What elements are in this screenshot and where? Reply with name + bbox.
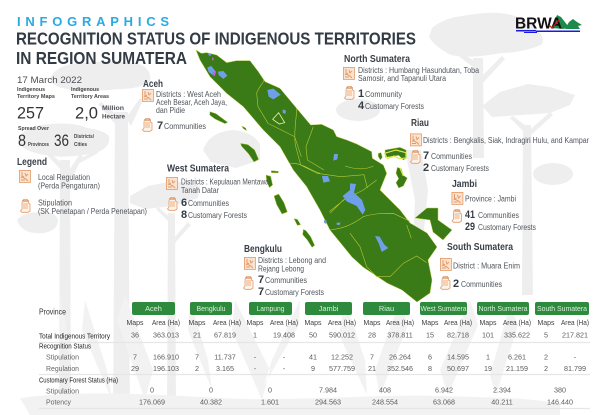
stipulation row: 7	[195, 352, 199, 362]
customary forest stipulation row	[150, 386, 566, 394]
customary forest stipulation row: 0	[150, 386, 154, 394]
legend: Stipulation	[38, 198, 72, 208]
region: Bengkulu: Bengkulu	[244, 243, 282, 255]
key figures: Indigenous	[17, 87, 45, 93]
stipulation row: 6.261	[508, 352, 526, 362]
right tree	[510, 112, 553, 295]
title: INFOGRAPHICS	[17, 14, 169, 29]
region: Bengkulu	[244, 243, 326, 298]
row labels: Province	[39, 308, 66, 316]
legend: Legend	[17, 156, 47, 168]
province buttons: Lampung	[256, 304, 284, 313]
region: Riau: Communities	[431, 152, 472, 161]
column headers: Maps	[422, 318, 439, 327]
date: 17 March 2022	[17, 75, 82, 86]
row labels	[39, 308, 118, 406]
key figures: Provinces	[28, 142, 49, 148]
province buttons: North Sumatera	[478, 304, 528, 313]
row labels: Customary Forest Status (Ha)	[39, 376, 118, 384]
regulation row: 21	[368, 364, 376, 373]
column headers: Maps	[364, 318, 381, 327]
column headers: Area (Ha)	[561, 318, 589, 327]
region: Aceh: 7	[157, 120, 163, 132]
upper-right tree	[456, 51, 505, 158]
region: Jambi: Jambi	[452, 178, 477, 190]
region: South Sumatera	[440, 241, 520, 290]
column headers: Maps	[304, 318, 322, 327]
customary forest potency row: 248.554	[372, 398, 398, 406]
province buttons: South Sumatera	[537, 304, 588, 313]
regulation row: 81.799	[564, 364, 586, 373]
key figures: Indigenous	[71, 87, 99, 93]
region: North Sumatera: Samosir, and Tapanuli Utara	[358, 74, 446, 83]
region: North Sumatera: 1	[358, 88, 364, 100]
customary forest stipulation row: 2.394	[493, 386, 511, 394]
region: Riau	[410, 117, 589, 174]
region: South Sumatera: South Sumatera	[447, 241, 513, 253]
region: North Sumatera: 4	[358, 100, 365, 112]
stipulation row: 166.910	[153, 352, 179, 362]
column headers: Maps	[246, 318, 264, 327]
region: South Sumatera: 2	[453, 278, 459, 290]
column headers: Maps	[480, 318, 497, 327]
region: Bengkulu: Districts : Lebong and	[258, 256, 326, 265]
total row: 101	[482, 330, 494, 340]
stipulation row: 14.595	[447, 352, 469, 362]
key figures: Hectare	[102, 114, 125, 120]
customary forest potency row: 40.211	[491, 398, 513, 406]
stipulation row: 12.252	[331, 352, 353, 362]
regulation row: 29	[131, 364, 139, 373]
total row: 19.408	[273, 330, 295, 340]
background: palm leaves	[20, 295, 560, 415]
stipulation row	[133, 352, 577, 362]
stipulation row: -	[574, 352, 577, 362]
region: West Sumatera	[166, 162, 272, 221]
region: Bengkulu: Customary Forests	[265, 288, 324, 297]
regulation row: 19	[484, 364, 492, 373]
total row: 50	[309, 330, 317, 340]
region: North Sumatera: North Sumatera	[344, 53, 410, 65]
region: Jambi: Province : Jambi	[465, 194, 516, 204]
key figures: Districts/	[74, 134, 94, 140]
stipulation row: -	[254, 352, 257, 362]
regulation row: 9	[311, 364, 315, 373]
key figures: 36	[54, 131, 69, 150]
region: Aceh	[142, 78, 227, 132]
column headers: Area (Ha)	[503, 318, 531, 327]
logo: BRWA: BRWA	[515, 16, 562, 32]
stipulation row: 1	[486, 352, 490, 362]
customary forest stipulation row: 408	[379, 386, 391, 394]
legend: (SK Penetapan / Perda Penetapan)	[38, 207, 147, 216]
region: South Sumatera: District : Muara Enim	[453, 262, 520, 270]
customary forest potency row: 1.601	[261, 398, 279, 406]
column headers: Area (Ha)	[270, 318, 298, 327]
regulation row: 2	[195, 364, 199, 373]
column headers: Area (Ha)	[213, 318, 241, 327]
customary forest stipulation row: 380	[554, 386, 566, 394]
stipulation row: 11.737	[214, 352, 236, 362]
total row: 217.821	[562, 330, 588, 340]
row labels: Stipulation	[46, 352, 79, 362]
column headers: Area (Ha)	[328, 318, 356, 327]
row labels: Potency	[46, 398, 71, 406]
region: West Sumatera: 8	[181, 209, 187, 221]
column headers	[126, 318, 589, 327]
key figures: Spread Over	[18, 126, 50, 132]
region: Riau: 7	[423, 150, 429, 162]
regulation row: 21.159	[506, 364, 528, 373]
customary forest stipulation row: 0	[268, 386, 272, 394]
region: Aceh: Districts : West Aceh	[156, 90, 221, 99]
column headers: Maps	[188, 318, 206, 327]
region: Jambi: 29	[465, 221, 475, 233]
region: West Sumatera: 6	[181, 197, 187, 209]
regulation row: -	[254, 364, 257, 373]
stipulation row: 41	[309, 352, 317, 362]
total row: 335.622	[504, 330, 530, 340]
regulation row: 196.103	[153, 364, 179, 373]
stipulation row: -	[283, 352, 286, 362]
customary forest potency row: 146.440	[547, 398, 573, 406]
province buttons: Jambi	[319, 304, 339, 313]
region: West Sumatera: West Sumatera	[167, 162, 229, 174]
region: West Sumatera: Customary Forests	[188, 211, 247, 220]
province buttons	[132, 302, 589, 315]
stipulation row: 7	[370, 352, 374, 362]
total row: 28	[368, 330, 376, 340]
total row: 590.012	[329, 330, 355, 340]
customary forest potency row: 63.068	[433, 398, 455, 406]
region: Jambi: Communities	[478, 211, 519, 220]
column headers: Maps	[126, 318, 144, 327]
key figures: Territory Maps	[17, 94, 55, 100]
stipulation row: 7	[133, 352, 137, 362]
total row	[131, 330, 588, 340]
customary forest potency row: 176.069	[139, 398, 165, 406]
region: West Sumatera: Communities	[188, 199, 229, 208]
total row: 5	[544, 330, 548, 340]
total row: 363.013	[153, 330, 179, 340]
regulation row: -	[283, 364, 286, 373]
column headers: Area (Ha)	[386, 318, 414, 327]
regulation row: 2	[544, 364, 548, 373]
key figures: 8	[18, 131, 26, 150]
total row: 15	[426, 330, 434, 340]
regulation row: 50.697	[447, 364, 469, 373]
region: North Sumatera: Community	[365, 90, 402, 99]
province buttons: Riau	[379, 304, 394, 313]
middle tree	[156, 207, 191, 415]
total row: 1	[253, 330, 257, 340]
region: Jambi: Customary Forests	[478, 223, 536, 232]
key figures: 257	[17, 104, 44, 122]
total row: 378.811	[387, 330, 413, 340]
region: Bengkulu: Rejang Lebong	[258, 264, 304, 274]
total row: 82.718	[447, 330, 469, 340]
title: IN REGION SUMATERA	[16, 48, 187, 68]
key figures: Territory Areas	[71, 94, 109, 100]
key figures: Cities	[74, 142, 87, 148]
regulation row: 577.759	[329, 364, 355, 373]
region: West Sumatera: Districts : Kepulauan Mentawai,	[181, 178, 272, 186]
row labels: Total Indigenous Territory	[39, 332, 110, 340]
customary forest stipulation row: 7.984	[319, 386, 337, 394]
upper-left tree	[98, 98, 143, 415]
title: RECOGNITION STATUS OF INDIGENOUS TERRITORIES	[16, 28, 416, 48]
total row: 21	[193, 330, 201, 340]
region: West Sumatera: Tanah Datar	[181, 186, 219, 195]
customary forest stipulation row: 0	[209, 386, 213, 394]
regulation row: 352.546	[387, 364, 413, 373]
region: Bengkulu: 7	[258, 286, 264, 298]
customary forest potency row: 294.563	[315, 398, 341, 406]
region: South Sumatera: Communities	[461, 280, 502, 289]
column headers: Area (Ha)	[152, 318, 180, 327]
region: Aceh: dan Pidie	[156, 106, 185, 115]
total row: 67.819	[214, 330, 236, 340]
province buttons: Bengkulu	[196, 304, 226, 313]
legend: (Perda Pengaturan)	[38, 182, 100, 190]
stipulation row: 26.264	[389, 352, 411, 362]
legend	[17, 156, 147, 216]
column headers: Area (Ha)	[444, 318, 472, 327]
row labels: Regulation	[46, 364, 79, 373]
region: Aceh: Communities	[164, 122, 206, 131]
customary forest stipulation row: 6.942	[435, 386, 453, 394]
region: Aceh: Aceh	[143, 78, 163, 90]
regulation row: 3.165	[216, 364, 234, 373]
regulation row: 8	[428, 364, 432, 373]
stipulation row: 2	[544, 352, 548, 362]
region: Aceh: Aceh Besar, Aceh Jaya,	[156, 98, 227, 107]
title	[16, 14, 416, 68]
row labels: Recognition Status	[39, 342, 91, 350]
recognition table	[39, 302, 590, 408]
region: Riau: Customary Forests	[431, 164, 489, 173]
total row: 36	[131, 330, 139, 340]
key figures: 2,0	[75, 104, 98, 122]
logo: BRWA	[515, 15, 582, 33]
regulation row	[131, 364, 586, 373]
customary forest potency row: 40.382	[200, 398, 222, 406]
region: North Sumatera	[343, 53, 479, 112]
customary forest potency row	[139, 398, 573, 406]
column headers: Maps	[538, 318, 555, 327]
region: Jambi	[452, 178, 536, 233]
row labels: Stipulation	[46, 386, 79, 396]
stipulation row: 6	[428, 352, 432, 362]
region: Jambi: 41	[465, 209, 475, 221]
lower-left tree	[48, 150, 98, 415]
province buttons: West Sumatera	[420, 304, 467, 313]
region: Riau: Riau	[411, 117, 429, 129]
region: Bengkulu: Communities	[265, 276, 307, 285]
region: North Sumatera: Customary Forests	[365, 102, 424, 111]
map of Sumatra	[196, 50, 452, 302]
key figures: Million	[102, 105, 124, 112]
region: North Sumatera: Districts : Humbang Hasundutan, Toba	[358, 66, 479, 75]
region: Riau: 2	[423, 162, 429, 174]
province buttons: Aceh	[145, 304, 162, 313]
key figures	[17, 87, 125, 150]
region: Bengkulu: 7	[258, 274, 264, 286]
legend: Local Regulation	[38, 173, 90, 182]
